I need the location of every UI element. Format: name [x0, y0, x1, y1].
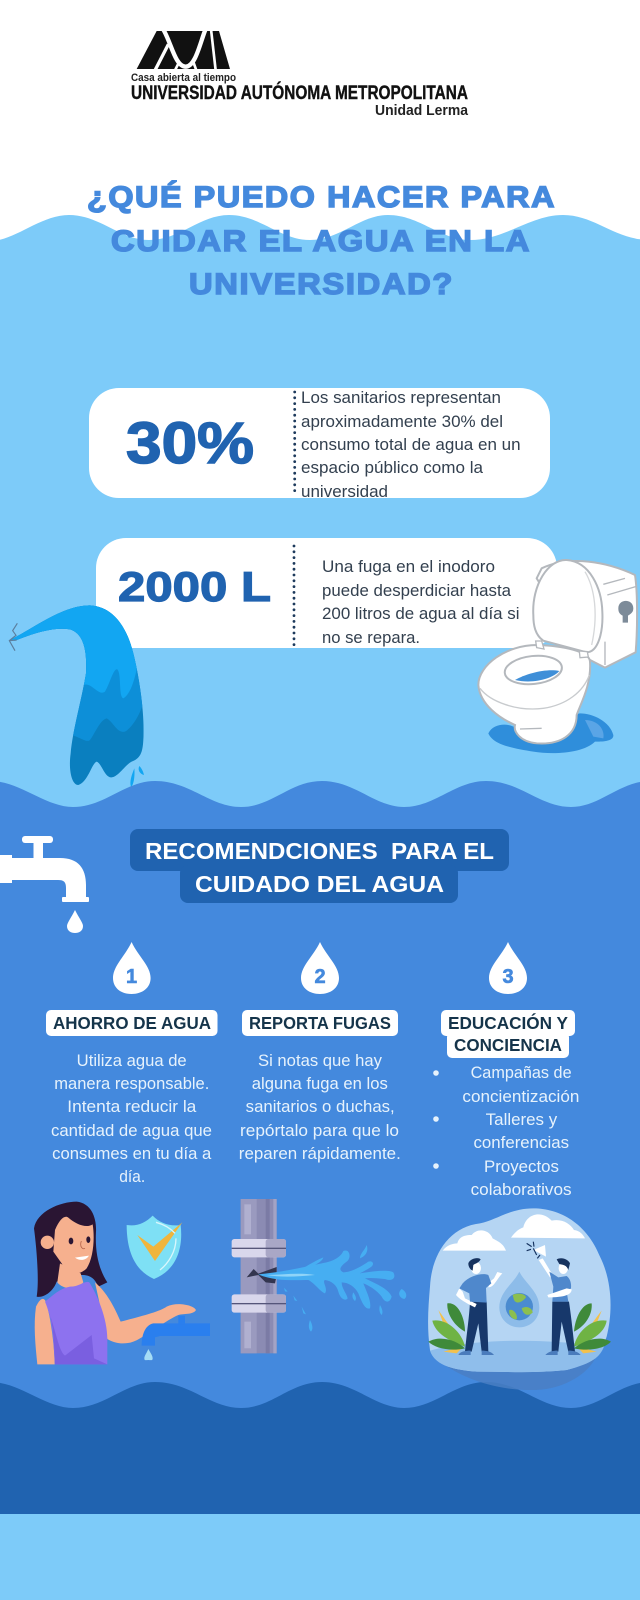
drop with globe — [499, 1272, 539, 1327]
panel: educación y conciencia — [433, 1010, 579, 1199]
bullet list: conferencias — [474, 1134, 569, 1152]
body text: alguna fuga en los — [252, 1075, 388, 1093]
lid — [533, 560, 602, 652]
logo: UAM Unidad Lerma: Casa abierta al tiempo — [131, 72, 236, 84]
tap — [142, 1323, 210, 1346]
tank — [537, 561, 637, 668]
title — [87, 180, 556, 301]
splash — [258, 1251, 394, 1309]
stat description: universidad — [301, 483, 388, 501]
icon: white faucet with drop — [0, 836, 89, 933]
background: mid-blue section wave — [0, 781, 640, 1430]
body text: sanitarios o duchas, — [246, 1098, 395, 1116]
body text: Utiliza agua de — [77, 1052, 187, 1070]
dress — [45, 1282, 107, 1364]
stat description: Los sanitarios representan — [301, 389, 501, 407]
stat description — [322, 558, 520, 647]
neck and arms — [57, 1263, 83, 1288]
icon: numbered drop 2: 2 — [314, 966, 326, 988]
logo: UAM Unidad Lerma: UNIVERSIDAD AUTÓNOMA METROPOLITANA — [131, 82, 468, 104]
background: dark blue wave band — [0, 1382, 640, 1514]
stat number: 30%: 30% — [126, 411, 254, 476]
crack — [247, 1267, 277, 1283]
bullet list — [433, 1064, 579, 1199]
hair — [34, 1202, 107, 1297]
panel: reporta fugas — [239, 1010, 401, 1163]
stat description: espacio público como la — [301, 459, 484, 477]
stat description: Una fuga en el inodoro — [322, 558, 495, 576]
title: CUIDAR EL AGUA EN LA — [111, 225, 531, 258]
shield — [127, 1216, 181, 1279]
label — [441, 1010, 575, 1058]
body text: Si notas que hay — [258, 1052, 383, 1070]
icon: numbered drop 3 — [489, 942, 527, 994]
icon: numbered drop 1 — [113, 942, 151, 994]
title: UNIVERSIDAD? — [189, 268, 454, 301]
stat description: 200 litros de agua al día si — [322, 605, 520, 623]
icon: numbered drop 1: 1 — [126, 966, 137, 988]
panel: 30% stat card — [89, 388, 550, 501]
illustration: broken pipe with splash — [232, 1199, 406, 1353]
background: bottom light strip — [0, 1514, 640, 1600]
body text — [51, 1052, 212, 1186]
stat description: puede desperdiciar hasta — [322, 582, 512, 600]
stat description — [301, 389, 521, 501]
label: EDUCACIÓN Y — [448, 1012, 568, 1033]
body text — [239, 1052, 401, 1163]
blob shadow — [440, 1355, 597, 1390]
man left — [456, 1258, 502, 1355]
title: ¿QUÉ PUEDO HACER PARA — [87, 180, 556, 214]
bowl — [478, 645, 590, 743]
bullet list: Campañas de — [471, 1064, 572, 1082]
bullet list: Proyectos — [484, 1158, 559, 1176]
stat description: consumo total de agua en un — [301, 436, 521, 454]
panel: ahorro de agua — [46, 1010, 218, 1186]
leaves right — [577, 1311, 602, 1353]
blob — [428, 1208, 611, 1372]
illustration: woman closing tap — [34, 1202, 210, 1364]
man right — [527, 1242, 581, 1355]
icon: UAM emblem — [137, 29, 230, 70]
body text: cantidad de agua que — [51, 1122, 212, 1140]
pipe — [241, 1199, 277, 1353]
icon: water stream — [8, 605, 144, 786]
logo: UAM Unidad Lerma: Unidad Lerma — [375, 103, 469, 119]
illustration: people with megaphone and globe drop — [428, 1208, 611, 1390]
label: AHORRO DE AGUA — [53, 1013, 211, 1033]
flanges — [232, 1239, 286, 1257]
body text: manera responsable. — [54, 1075, 209, 1093]
icon: leaking toilet — [478, 560, 637, 753]
body text: Intenta reducir la — [67, 1098, 197, 1116]
logo: UAM Unidad Lerma — [131, 29, 469, 119]
heading: recommendations — [130, 829, 509, 903]
body text: reparen rápidamente. — [239, 1145, 401, 1163]
bullet list: concientización — [462, 1088, 579, 1106]
bullet list: Talleres y — [486, 1111, 558, 1129]
leaves left — [438, 1310, 463, 1353]
label: CONCIENCIA — [454, 1035, 562, 1055]
puddle — [488, 713, 613, 753]
body text: consumes en tu día a — [52, 1145, 212, 1163]
heading: recommendations: CUIDADO DEL AGUA — [195, 871, 444, 897]
panel: 2000 L stat card — [96, 538, 557, 648]
label: REPORTA FUGAS — [249, 1013, 391, 1033]
body text: repórtalo para que lo — [240, 1122, 399, 1140]
icon: numbered drop 3: 3 — [502, 966, 514, 988]
stat description: aproximadamente 30% del — [301, 413, 503, 431]
stat number: 2000 L: 2000 L — [118, 563, 271, 610]
stat description: no se repara. — [322, 629, 420, 647]
face — [53, 1217, 94, 1274]
clouds — [443, 1230, 506, 1251]
heading: recommendations: RECOMENDCIONES PARA EL — [145, 838, 494, 864]
bullet list: colaborativos — [471, 1181, 572, 1199]
body text: día. — [119, 1168, 145, 1186]
icon: numbered drop 2 — [301, 942, 339, 994]
